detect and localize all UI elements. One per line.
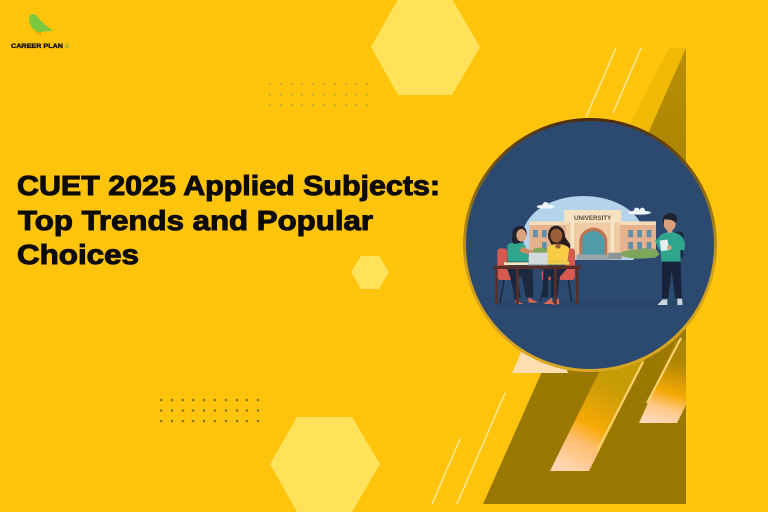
dot grid: top: [269, 83, 368, 106]
gradient stripe left: [550, 350, 650, 471]
sign: [564, 210, 621, 223]
hair: [663, 213, 677, 224]
hand: [667, 245, 672, 250]
legs: [507, 267, 533, 297]
gradient stripe right: [639, 340, 686, 423]
sign text: UNIVERSITY: [574, 215, 612, 222]
arm right: [670, 234, 685, 251]
windows: [533, 230, 651, 249]
circle badge: [464, 120, 716, 370]
backpack: [673, 232, 683, 258]
wordmark: CAREER PLAN: [11, 44, 63, 50]
building: [529, 210, 659, 260]
legs: [662, 261, 682, 298]
hexagon: small middle: [351, 256, 389, 289]
wordmark letter B: B: [65, 44, 70, 50]
decorative slanted panel: [432, 48, 686, 504]
face: [550, 229, 562, 243]
shirt: [507, 242, 530, 262]
peach triangle: [512, 350, 568, 373]
books: [504, 262, 569, 265]
clouds: [537, 202, 651, 215]
table: [493, 266, 581, 304]
title line 2: Top Trends and Popular: [18, 205, 373, 236]
thin line top 1: [586, 48, 616, 117]
thin line bottom 2: [457, 393, 505, 504]
arch: [579, 228, 607, 255]
title line 3: Choices: [17, 239, 139, 270]
legs: [543, 267, 568, 297]
hexagon: bottom: [270, 417, 380, 512]
chair legs: [500, 280, 572, 303]
columns: [571, 223, 574, 254]
face: [516, 229, 526, 242]
thin line top 2: [613, 48, 641, 113]
thin line bottom 1: [432, 439, 460, 504]
title line 1: CUET 2025 Applied Subjects:: [17, 170, 440, 201]
steps: [577, 255, 610, 260]
sky blob: [523, 196, 640, 260]
tablet: [660, 239, 669, 251]
logo: Career Plan B: [11, 14, 70, 50]
neck: [667, 229, 672, 233]
face: [664, 216, 676, 231]
student left: [507, 226, 538, 304]
shoes: [657, 299, 683, 305]
dark slanted polygon: [483, 48, 686, 504]
shirt: [659, 232, 681, 262]
icon: green bird: [29, 14, 53, 35]
shoes: [515, 297, 538, 304]
wings: [529, 223, 656, 257]
ground shadow: [487, 300, 693, 308]
hair: [548, 226, 570, 248]
central block: [566, 220, 620, 256]
title: [17, 170, 440, 270]
chairs: [497, 248, 575, 280]
accent line right: [647, 338, 681, 403]
illustration: university and students: [487, 196, 693, 308]
hair: [512, 226, 527, 244]
student middle: [543, 226, 570, 305]
bushes: [533, 248, 659, 259]
laptop: [527, 253, 548, 265]
shirt: [546, 244, 569, 262]
shoes: [543, 297, 559, 305]
student right: [655, 213, 685, 305]
dot grid: bottom: [160, 399, 259, 422]
lighter top stripe: [622, 48, 686, 150]
arm left: [655, 235, 663, 250]
hand: [555, 243, 561, 249]
accent line left: [597, 362, 643, 451]
arm: [519, 247, 534, 255]
hexagon: top: [371, 0, 480, 95]
